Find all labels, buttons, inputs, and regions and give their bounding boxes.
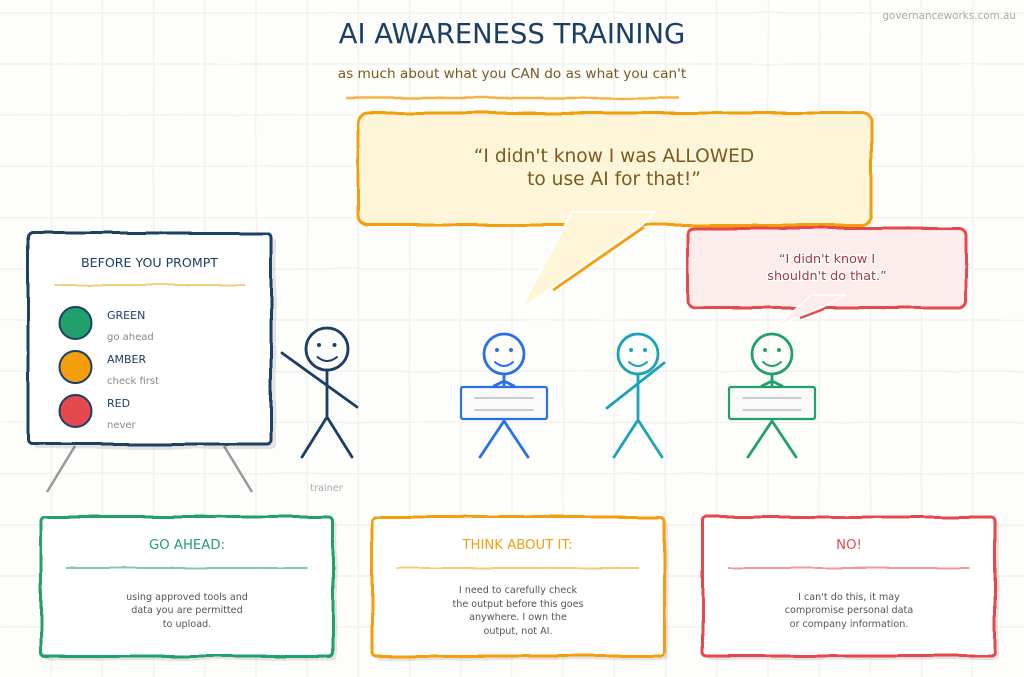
body: think about it: anywhere. I own the [469,612,567,623]
easel legs [47,446,252,492]
body: think about it: the output before this goes [452,599,584,610]
title: AI AWARENESS TRAINING [339,19,685,50]
speech bubble: allowed: “I didn't know I was ALLOWED [474,146,754,167]
speech bubble: shouldn't [688,228,966,327]
legend: amber: AMBER [107,353,147,366]
legend: green: go ahead [107,332,154,343]
legend: amber [60,351,159,387]
trainer label: trainer [310,483,343,494]
panel: no [703,517,999,660]
body: go ahead: using approved tools and [126,592,248,603]
body: go ahead: data you are permitted [131,605,243,616]
legend: green: GREEN [107,309,145,322]
source credit: governanceworks.com.au [882,10,1016,22]
speech bubble: allowed [358,113,871,310]
figure: green with sign [729,334,815,457]
figure: blue with sign [461,334,547,457]
heading: go ahead: GO AHEAD: [149,538,225,553]
legend: red [60,395,137,431]
body: no: or company information. [790,619,908,630]
legend: red: never [107,420,137,431]
legend: red: RED [107,397,130,410]
board heading: BEFORE YOU PROMPT [81,255,218,270]
body: think about it: I need to carefully check [459,585,578,596]
speech bubble: allowed: to use AI for that!” [527,169,701,190]
legend: green [60,307,154,343]
speech bubble: shouldn't: shouldn't do that.” [767,269,887,284]
body: no: I can't do this, it may [798,592,900,603]
subtitle underline [346,97,679,99]
figure: teal waving [607,334,664,457]
heading: no: NO! [836,538,862,553]
body: go ahead: to upload. [163,619,211,630]
panel: go ahead [41,517,337,660]
body: no: compromise personal data [785,605,913,616]
heading: think about it: THINK ABOUT IT: [461,538,573,553]
speech bubble: shouldn't: “I didn't know I [779,252,875,267]
figure: trainer [282,328,357,457]
easel board [28,233,276,492]
panel: think about it [372,517,668,660]
body: think about it: output, not AI. [483,626,553,637]
subtitle: as much about what you CAN do as what you can't [338,66,687,82]
legend: amber: check first [107,376,159,387]
board panel [28,233,276,449]
